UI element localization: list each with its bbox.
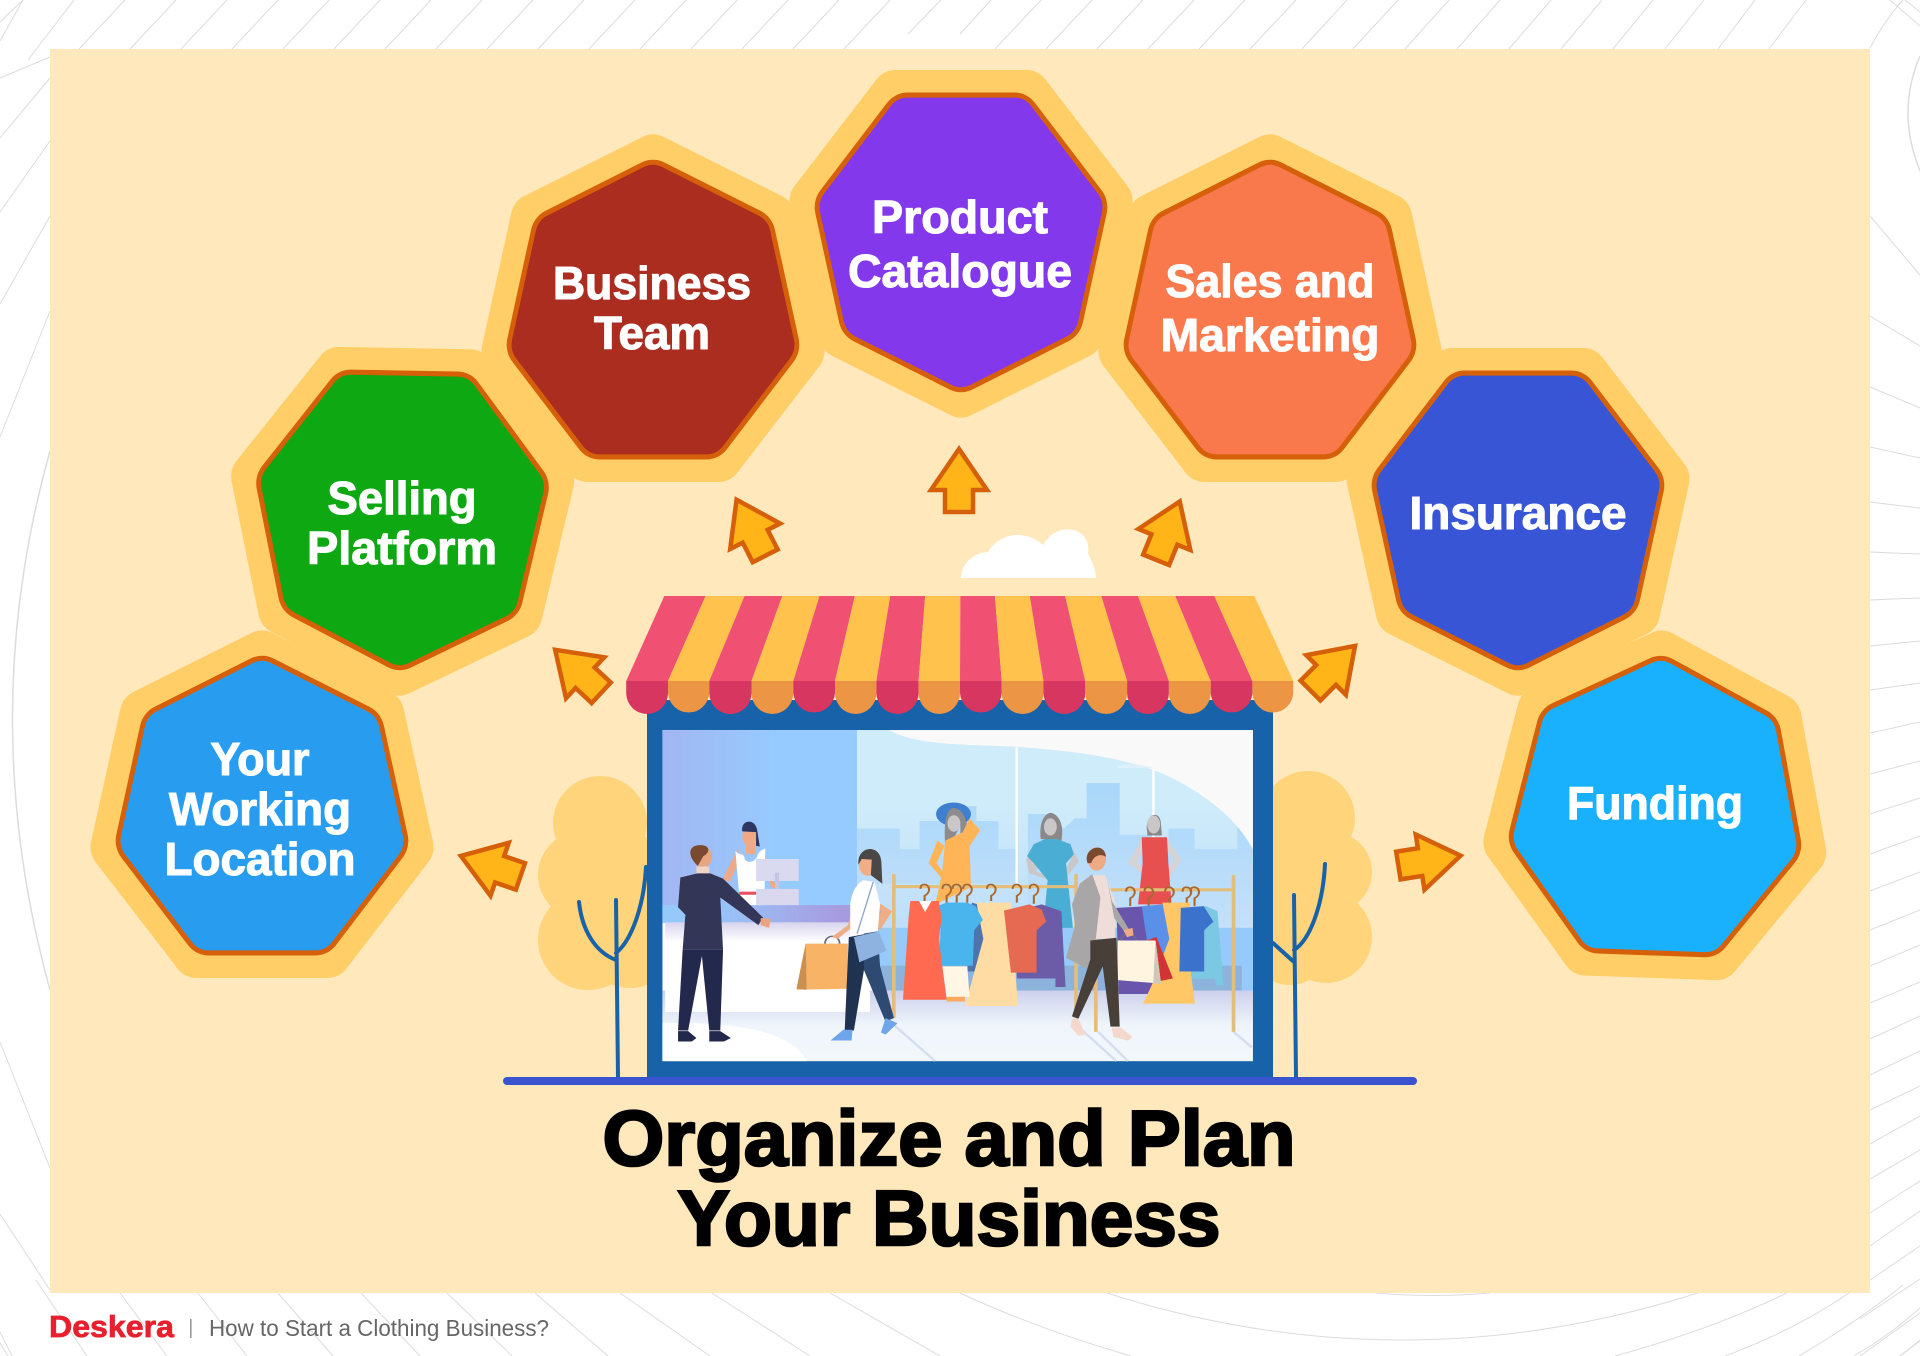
panel: Business Team (533, 187, 773, 432)
arrow: to Selling Platform (536, 629, 620, 713)
panel: Your Working Location (142, 683, 382, 928)
panel: Insurance (1398, 398, 1638, 643)
panel: Sales and Marketing (1150, 187, 1390, 432)
title: Your Business (678, 1174, 1220, 1262)
shop counter (662, 905, 883, 1012)
ground line (503, 1077, 1417, 1085)
footer (49, 1309, 549, 1344)
label: Business Team: Business (553, 257, 751, 309)
tree foliage: left (538, 776, 678, 990)
arrow: to Sales and Marketing (1130, 491, 1206, 570)
awning (626, 596, 1293, 714)
label: Sales and Marketing: Marketing (1160, 309, 1380, 361)
mannequin: red dress (1128, 815, 1181, 904)
clothes rack: left (894, 874, 1076, 1018)
footer divider (190, 1319, 192, 1338)
tree: left (579, 867, 646, 1077)
label: Selling Platform: Selling (328, 472, 476, 524)
mannequin: orange dress (929, 802, 980, 904)
label: Selling Platform: Platform (307, 522, 497, 574)
woman in cardigan (1066, 847, 1173, 1040)
awning scallops (626, 681, 1293, 714)
arrow: to Funding (1394, 828, 1465, 893)
tree foliage: right (1250, 771, 1372, 985)
logo: Deskera: Deskera (49, 1309, 175, 1344)
label: Your Working Location: Location (164, 833, 356, 885)
mannequin: teal dress (1026, 813, 1079, 928)
woman with shopping bag (796, 849, 897, 1040)
panel: Product Catalogue (841, 120, 1081, 365)
arrows (452, 449, 1465, 903)
label: Your Working Location: Working (169, 783, 351, 835)
arrow: to Business Team (712, 487, 790, 569)
label: Business Team: Team (594, 307, 710, 359)
shop building (647, 700, 1273, 1078)
title: Organize and Plan (602, 1094, 1296, 1182)
tree: right (1273, 864, 1325, 1077)
arrow: to Insurance (1291, 626, 1375, 710)
label: Product Catalogue: Product (872, 191, 1048, 243)
cloud (961, 529, 1096, 578)
shop window scene (662, 730, 1253, 1061)
panel: Selling Platform (280, 396, 524, 645)
hexagon halos (114, 94, 1810, 959)
arrow: to Product Catalogue (931, 449, 987, 512)
man in suit (678, 845, 771, 1041)
city skyline (857, 783, 1253, 929)
footer caption: How to Start a Clothing Business? (209, 1315, 549, 1341)
label: Funding: Funding (1567, 777, 1743, 829)
shop assistant (723, 822, 799, 905)
label: Product Catalogue: Catalogue (848, 245, 1072, 297)
label: Your Working Location: Your (210, 733, 310, 785)
clothes rack: right (1096, 875, 1234, 1032)
label: Sales and Marketing: Sales and (1166, 255, 1374, 307)
arrow: to Your Working Location (452, 829, 530, 903)
panel: Funding (1532, 679, 1780, 932)
label: Insurance: Insurance (1410, 487, 1626, 539)
